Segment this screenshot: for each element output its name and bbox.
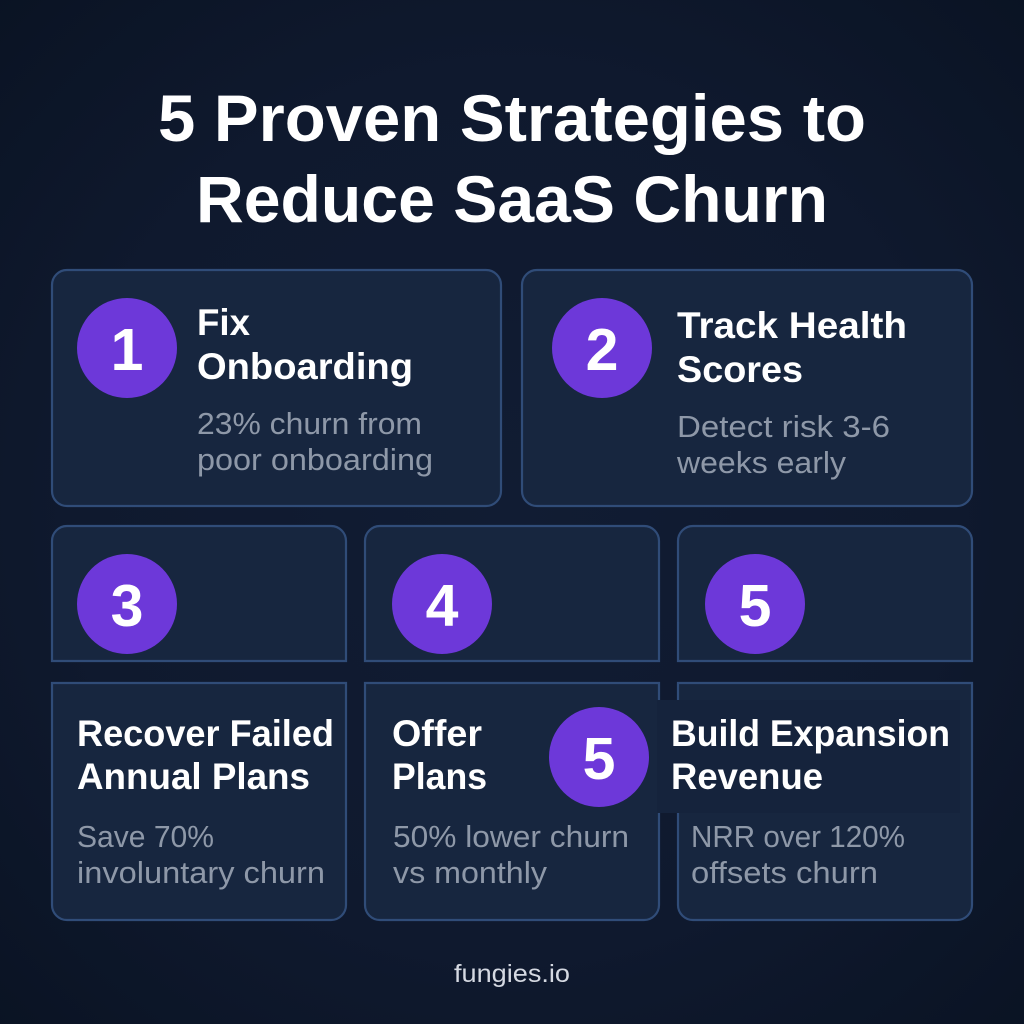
- heading: track health scores: [677, 305, 907, 390]
- text: recovery statistic: involuntary churn: [77, 855, 325, 890]
- title: 5 Proven Strategies to: [158, 81, 866, 155]
- panel: strategy 5 build expansion revenue: [549, 683, 972, 920]
- icon: number 1 badge: [77, 298, 177, 398]
- text: health score benefit: [676, 409, 890, 480]
- icon: number 2 badge: [552, 298, 652, 398]
- panel: strategy 5 top section: [678, 526, 972, 661]
- heading: fix onboarding: Fix: [197, 302, 250, 343]
- text: onboarding statistic: poor onboarding: [197, 442, 433, 477]
- icon: number 3 badge: 3: [111, 573, 143, 639]
- icon: number 2 badge: 2: [586, 317, 618, 383]
- icon: number 4 badge: [392, 554, 492, 654]
- heading: offer plans: [392, 713, 487, 797]
- icon: overlapping number 5 badge: 5: [583, 726, 615, 792]
- text: expansion statistic: NRR over 120%: [691, 819, 905, 854]
- heading: track health scores: Track Health: [677, 305, 907, 346]
- panel: strategy 3 recover failed payments: [52, 683, 346, 920]
- text: annual plan statistic: [393, 819, 629, 890]
- icon: number 4 badge: 4: [426, 573, 459, 639]
- text: annual plan statistic: 50% lower churn: [393, 819, 629, 854]
- heading: fix onboarding: [197, 302, 413, 387]
- text: expansion statistic: [691, 819, 905, 890]
- icon: overlapping number 5 badge: [549, 707, 649, 807]
- panel: strategy 4 offer plans: [365, 683, 659, 920]
- text: onboarding statistic: [197, 406, 433, 477]
- text: annual plan statistic: vs monthly: [393, 855, 548, 890]
- heading: track health scores: Scores: [677, 349, 803, 390]
- icon: number 5 badge: 5: [739, 573, 771, 639]
- heading: build expansion revenue: [671, 713, 950, 797]
- panel: strategy 2 track health scores: [522, 270, 972, 506]
- text: expansion statistic: offsets churn: [691, 855, 878, 890]
- heading: fix onboarding: Onboarding: [197, 346, 413, 387]
- text: health score benefit: weeks early: [676, 445, 847, 480]
- footer brand: fungies.io: [454, 960, 570, 988]
- text: onboarding statistic: 23% churn from: [197, 406, 422, 441]
- heading: recover failed annual plans: Annual Plans: [77, 756, 310, 797]
- text: health score benefit: Detect risk 3-6: [677, 409, 890, 444]
- text: recovery statistic: Save 70%: [77, 819, 214, 854]
- icon: number 3 badge: [77, 554, 177, 654]
- overlay patch behind heading: [657, 700, 960, 813]
- heading: build expansion revenue: Build Expansion: [671, 713, 950, 754]
- title: [158, 81, 866, 236]
- icon: number 5 badge: [705, 554, 805, 654]
- panel: strategy 3 top section: [52, 526, 346, 661]
- panel: strategy 1 fix onboarding: [52, 270, 501, 506]
- heading: offer plans: Plans: [392, 756, 487, 797]
- title: Reduce SaaS Churn: [196, 162, 828, 236]
- heading: recover failed annual plans: [77, 713, 334, 797]
- heading: offer plans: Offer: [392, 713, 482, 754]
- panel: strategy 4 top section: [365, 526, 659, 661]
- heading: recover failed annual plans: Recover Failed: [77, 713, 334, 754]
- heading: build expansion revenue: Revenue: [671, 756, 823, 797]
- icon: number 1 badge: 1: [111, 317, 143, 383]
- text: recovery statistic: [77, 819, 325, 890]
